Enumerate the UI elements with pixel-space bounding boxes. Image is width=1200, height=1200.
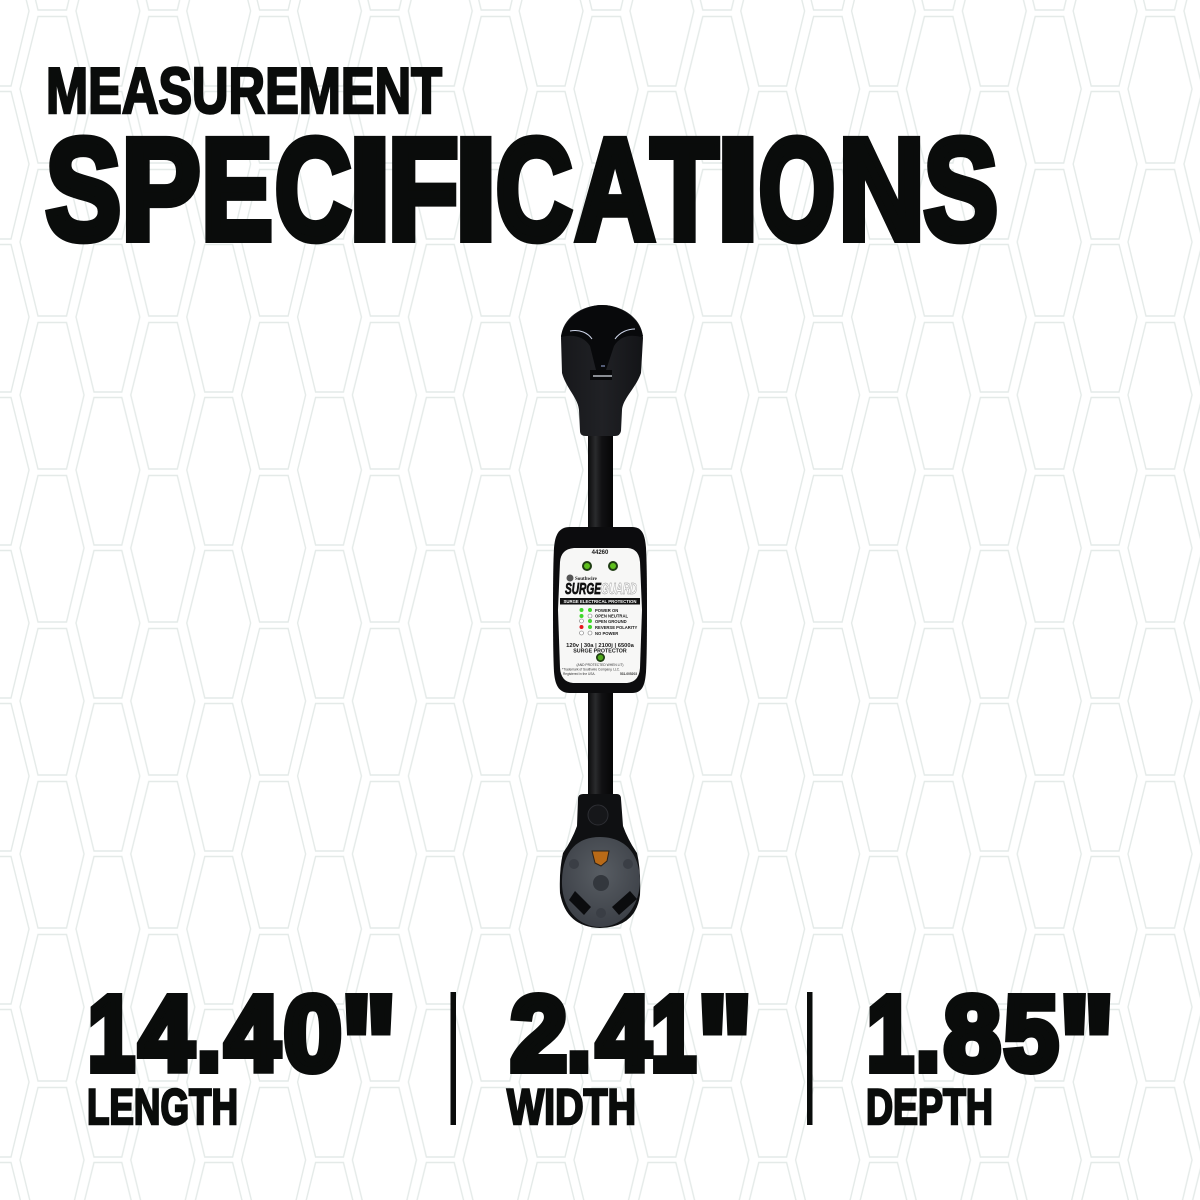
measurement: depth: " (1059, 968, 1115, 1122)
measurement: length: LENGTH (87, 1079, 238, 1135)
title: specifications: P (121, 109, 201, 270)
measurement: length: 0 (284, 975, 342, 1093)
measurement: width: 1 (651, 975, 696, 1093)
measurement: width: WIDTH (507, 1079, 636, 1135)
divider: length and width (450, 992, 456, 1125)
center housing: *Trademark of Southwire Company, LLC. (562, 668, 620, 672)
title: specifications: F (388, 109, 459, 270)
center housing: Southwire (575, 577, 598, 582)
status lights (580, 608, 638, 636)
title: specifications: A (575, 109, 655, 270)
lower cord (588, 690, 613, 798)
male plug (561, 305, 643, 436)
female plug (560, 794, 640, 928)
protected light (596, 653, 605, 662)
fine print: (AND PROTECTED WHEN LIT) (576, 663, 624, 667)
title: measurement: MEASUREMENT (46, 54, 442, 127)
title: specifications: C (496, 109, 572, 270)
status lights: REVERSE POLARITY (595, 625, 638, 630)
status lights: POWER ON (595, 608, 618, 613)
measurement: width: 4 (596, 975, 651, 1093)
center housing (553, 527, 647, 693)
black band (560, 598, 640, 604)
model number: 44260 (592, 550, 609, 556)
title: specifications: I (348, 109, 392, 270)
measurement: width: . (567, 975, 591, 1093)
measurement: length: 4 (139, 975, 194, 1093)
measurement: width: 2 (510, 975, 567, 1093)
measurement: depth: . (916, 975, 940, 1093)
measurement: width (507, 968, 753, 1135)
top indicator lights (582, 561, 592, 571)
upper cord (588, 430, 613, 530)
measurement: depth: 1 (867, 975, 914, 1093)
title: specifications: I (716, 109, 760, 270)
title: specifications: S (46, 109, 121, 270)
center housing: Registered in the USA. (563, 672, 596, 676)
center housing: SURGE PROTECTOR (573, 648, 627, 654)
title: specifications: N (838, 109, 925, 270)
title: specifications: C (275, 109, 352, 270)
measurement: length: 1 (88, 975, 135, 1093)
measurement: depth: 5 (1004, 975, 1058, 1093)
measurement: depth (866, 968, 1115, 1135)
status lights: NO POWER (595, 631, 618, 636)
status lights: OPEN NEUTRAL (595, 614, 628, 618)
title: specifications: S (924, 109, 998, 270)
measurement: width: " (697, 968, 753, 1122)
title: specifications: E (201, 109, 273, 270)
measurement: depth: 8 (944, 975, 1001, 1093)
measurement: length: . (197, 975, 221, 1093)
measurement: length: " (341, 968, 397, 1122)
status lights: OPEN GROUND (595, 619, 627, 624)
brand name: SURGEGUARD (565, 581, 637, 598)
center housing: SURGE ELECTRICAL PROTECTION (564, 599, 636, 604)
center housing: 531-005203 (620, 672, 637, 676)
brand logo (566, 574, 574, 582)
measurement: depth: DEPTH (866, 1079, 993, 1135)
title: specifications: I (454, 109, 498, 270)
measurement: length: 4 (225, 975, 280, 1093)
ratings: 120v | 30a | 2100j | 6500a (566, 643, 635, 649)
divider: width and depth (807, 992, 812, 1125)
measurement: length (87, 968, 397, 1135)
title: specifications: O (759, 109, 835, 270)
product: surge protector (553, 305, 647, 928)
title: specifications: T (651, 109, 718, 270)
